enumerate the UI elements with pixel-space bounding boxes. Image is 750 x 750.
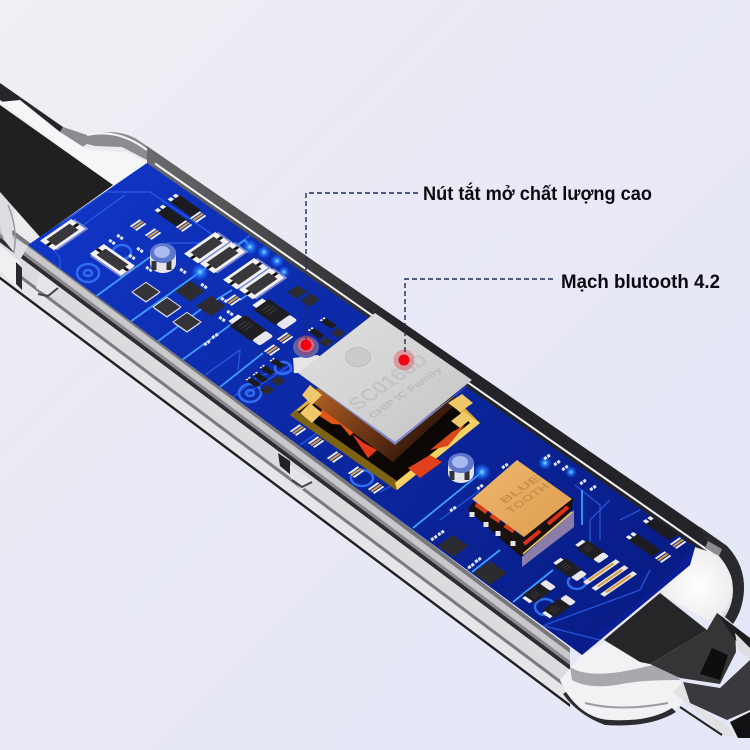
orange blocks [318, 405, 345, 425]
right dark cap rim [700, 527, 744, 624]
top left grey bridge [60, 127, 147, 160]
callout: power button [296, 183, 652, 355]
left black ribbon cable [0, 105, 113, 237]
gold chip module: BLUE [498, 474, 544, 506]
gold top [472, 460, 572, 537]
leader line [405, 279, 553, 360]
ribbon [604, 593, 707, 664]
metal push button [293, 336, 322, 373]
body side [521, 497, 573, 557]
gold chip module [468, 460, 574, 567]
outer gold plate [290, 390, 480, 490]
chip marking: SC0168D [343, 351, 434, 414]
label: Nút tắt mở chất lượng cao [423, 183, 652, 205]
connector body [683, 660, 750, 720]
surface components, right section [438, 516, 686, 620]
concentric pads [77, 245, 586, 615]
lower cap glass [560, 642, 690, 724]
body front [468, 502, 523, 557]
black wire [730, 712, 750, 738]
leader line [306, 193, 418, 345]
black inner layer [298, 395, 470, 481]
translucent sleeve [650, 613, 736, 684]
board end face [582, 547, 695, 655]
board surface [28, 163, 695, 655]
gold chip module: TOOTH [504, 481, 553, 516]
surface components, left section [40, 193, 345, 395]
connector pins [583, 559, 637, 597]
chip button recess [346, 348, 370, 366]
rail clips [278, 453, 291, 475]
connector top strip [717, 613, 750, 650]
left glass end [0, 83, 147, 287]
lower plate [522, 510, 574, 567]
pins [472, 512, 513, 546]
top left dark rim [0, 83, 70, 138]
circuit board [28, 163, 695, 655]
label: Mạch blutooth 4.2 [561, 272, 720, 293]
circuit traces [50, 192, 650, 645]
glowing trace nodes [191, 239, 577, 481]
large silver chip: CHIP IC Family [366, 366, 446, 421]
upper rail highlight line [155, 164, 716, 556]
callout: bluetooth circuit [394, 272, 720, 370]
gold pads [302, 385, 322, 405]
copper layer [305, 380, 460, 462]
stacked PCB layers [290, 380, 480, 490]
large silver chip [298, 313, 472, 445]
marker [296, 335, 316, 355]
marker [394, 350, 414, 370]
upper dark rail [147, 146, 735, 560]
lower rail bands [0, 220, 570, 707]
right black ribbon cable and connector [604, 593, 750, 738]
small pads [108, 234, 597, 569]
left glass cap interior [0, 100, 147, 185]
pads under stack [290, 424, 384, 494]
right glass cap [660, 547, 735, 625]
capacitor [448, 453, 474, 483]
